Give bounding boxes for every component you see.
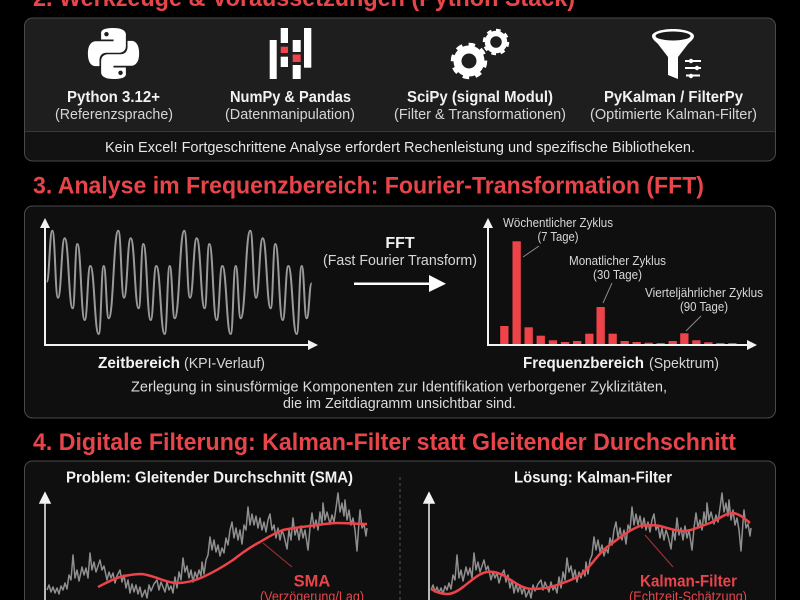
axis caption: Zeitbereich [98,355,180,372]
kalman label [629,572,747,600]
panel: fft [24,206,776,418]
chart title: Lösung: Kalman-Filter [514,470,672,486]
description text [131,380,667,412]
chart title: Problem: Gleitender Durchschnitt (SMA) [66,470,353,486]
heading: section 4: 4. Digitale Filterung: Kalman-Filter statt Gleitender Durchschnitt [33,429,736,456]
axis caption: (Spektrum) [649,356,719,372]
axes [488,226,749,345]
arrow [354,275,446,292]
panel background [24,206,776,418]
label: python: Python 3.12+ [67,89,160,106]
callout: quarterly [645,286,763,331]
chart: time domain [40,218,318,372]
axes [45,226,310,345]
axis caption [98,355,265,372]
pointer [263,543,292,567]
pointer [645,535,673,567]
callout: monthly [569,254,666,303]
callout: weekly: Wöchentlicher Zyklus [503,216,613,230]
label: pykalman: PyKalman / FilterPy [604,89,743,106]
label: python: (Referenzsprache) [55,107,173,123]
axis caption [523,355,719,372]
panel background [24,18,776,161]
callout: monthly: Monatlicher Zyklus [569,254,666,268]
label: numpy pandas: (Datenmanipulation) [225,107,355,123]
callout: quarterly: Vierteljährlicher Zyklus [645,286,763,300]
panel background [24,461,776,600]
fft label [323,235,477,269]
bars [500,241,736,345]
callout: monthly: (30 Tage) [593,268,642,282]
callout: quarterly: (90 Tage) [680,300,728,314]
label: pykalman: (Optimierte Kalman-Filter) [590,107,757,123]
chart: sma [40,470,367,600]
axis caption: Frequenzbereich [523,355,644,372]
fft label: (Fast Fourier Transform) [323,253,477,269]
label: numpy pandas [225,89,355,123]
waveform [47,231,312,334]
label: scipy: (Filter & Transformationen) [394,107,566,123]
label: scipy [394,89,566,123]
sma label: SMA [294,572,330,590]
footer strip: Kein Excel! Fortgeschrittene Analyse erfordert Rechenleistung und spezifische Bibliotheken. [105,139,695,156]
heading: section 3: 3. Analyse im Frequenzbereich: Fourier-Transformation (FFT) [33,172,704,200]
divider [399,477,401,600]
chart: kalman [424,470,751,600]
label: pykalman [590,89,757,123]
icon: numpy and pandas bars [270,28,311,79]
icon: gears [453,30,508,77]
sma label [260,572,364,600]
y axis [424,493,434,600]
footer strip [25,132,775,160]
axis caption: (KPI-Verlauf) [184,356,265,372]
noisy series [431,493,751,598]
description text: Zerlegung in sinusförmige Komponenten zur Identifikation verborgener Zyklizitäten, [131,380,667,396]
kalman line [431,513,750,594]
label: numpy pandas: NumPy & Pandas [230,89,351,106]
fft label: FFT [385,235,415,252]
description text: die im Zeitdiagramm unsichtbar sind. [283,396,516,412]
callout: weekly [503,216,613,257]
icon: funnel with sliders [652,29,701,79]
noisy series [47,493,367,598]
sma line [98,523,367,587]
panel: python stack [24,18,776,161]
y axis [40,493,50,600]
chart: spectrum [483,216,763,372]
icon: python logo [88,28,139,79]
callout: weekly: (7 Tage) [538,230,578,244]
panel: filtering [24,461,776,600]
label: python [55,89,173,123]
label: scipy: SciPy (signal Modul) [407,89,553,106]
kalman label: Kalman-Filter [640,572,738,590]
